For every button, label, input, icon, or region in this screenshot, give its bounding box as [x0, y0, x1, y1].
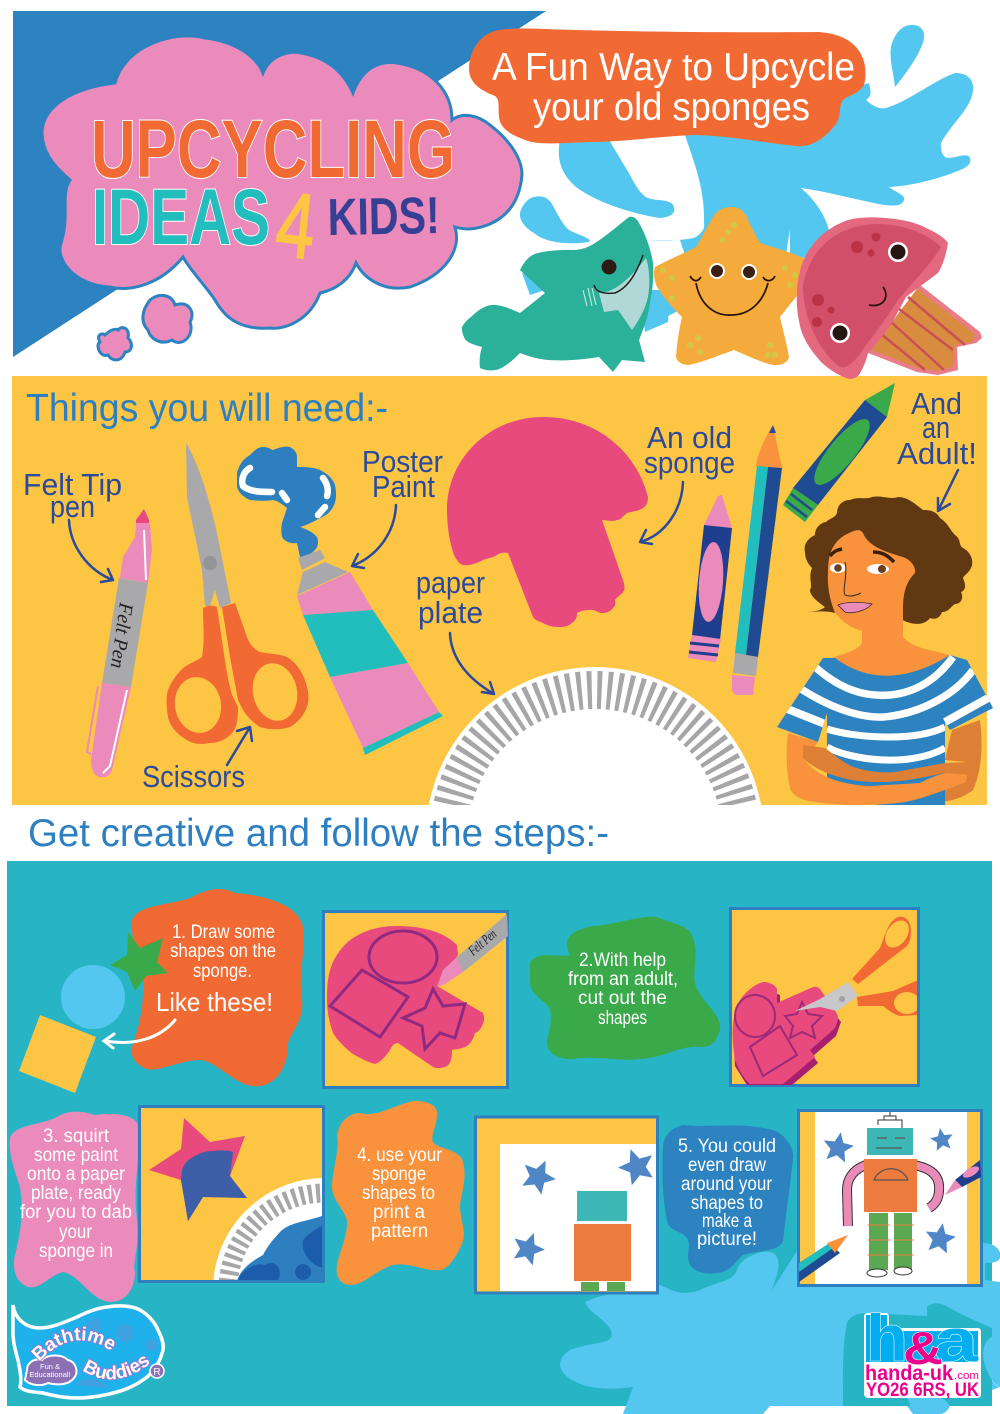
step 3 blob: your: [59, 1222, 93, 1243]
facial features: [830, 549, 894, 613]
jellyfish sponge: [797, 217, 982, 379]
label: paper plate: paper: [416, 565, 485, 600]
neck: [826, 610, 952, 690]
logo: bathtime buddies: [11, 1304, 165, 1400]
heading: get creative: Get creative and follow the steps:-: [28, 812, 609, 855]
cloud text: [29, 1362, 71, 1379]
step 1 blob: shapes on the: [170, 941, 276, 962]
step 3 blob: [10, 1112, 139, 1302]
felt tip pen: [87, 509, 152, 777]
label: scissors: Scissors: [142, 759, 245, 794]
step 1 text: 1. Draw some: [172, 922, 275, 943]
panel: steps: [7, 861, 1000, 1414]
step 2 blob: cut out the: [578, 988, 667, 1009]
small cloud 1: [143, 295, 192, 342]
step 4 blob: [332, 1101, 465, 1285]
brand text: Buddies: [82, 1356, 150, 1380]
registered mark: [150, 1364, 164, 1378]
step 4 text: 4. use your: [357, 1145, 443, 1166]
step 5 blob: [662, 1125, 793, 1274]
small cloud 2: [98, 328, 131, 360]
forearms: [787, 733, 968, 805]
adult illustration: [770, 497, 1000, 810]
logo: h&a: a: [934, 1307, 979, 1374]
step box 2: [730, 908, 920, 1090]
shape: yellow square: [19, 1015, 96, 1093]
cloud text: Fun &: [40, 1362, 60, 1371]
step 5 blob: picture!: [697, 1229, 757, 1250]
logo: h&a: &: [903, 1322, 943, 1374]
labels: [23, 386, 977, 794]
brand text: [30, 1326, 150, 1380]
title text: KIDS!: [327, 187, 440, 247]
subtitle banner: [469, 28, 866, 146]
sponge with drawn shapes: [327, 926, 484, 1068]
logo: bathtime buddies: R: [153, 1367, 161, 1378]
step 2 blob: shapes: [598, 1008, 647, 1029]
step 4 blob: pattern: [371, 1221, 428, 1242]
panel: things you will need: [12, 376, 993, 805]
step 3 blob: plate, ready: [31, 1183, 121, 1204]
step 5 blob: make a: [702, 1211, 752, 1232]
label: felt tip pen: pen: [50, 489, 95, 524]
cut sponge: [734, 994, 841, 1085]
step box 3: [138, 1105, 325, 1283]
step 5 text: 5. You could: [678, 1136, 776, 1157]
logo: h&a: h: [866, 1301, 908, 1375]
label: poster paint: Paint: [372, 469, 435, 504]
label: felt tip pen: Felt Tip: [23, 467, 122, 502]
arms: [895, 720, 982, 802]
face: [828, 530, 915, 632]
title text: IDEAS: [92, 172, 270, 261]
step 5 blob: around your: [681, 1174, 773, 1195]
green crayon: [783, 383, 895, 522]
robot picture: [847, 1112, 939, 1277]
jellyfish sponge shape: [447, 417, 648, 627]
shape: blue circle: [61, 965, 125, 1029]
logo: h&a: YO26 6RS, UK: [866, 1380, 979, 1401]
step 2 blob: [530, 917, 720, 1060]
shirt: [777, 655, 993, 805]
subtitle text: A Fun Way to Upcycle: [492, 46, 855, 89]
hair: [805, 497, 972, 624]
shark sponge: [462, 217, 653, 372]
arrow: to shapes: [104, 1020, 175, 1048]
step box 4: [476, 1117, 659, 1293]
step 3 blob: some paint: [34, 1145, 119, 1166]
title text: UPCYCLING: [91, 104, 455, 195]
logo: h&a: handa-uk: [865, 1362, 953, 1385]
poster paint tube: [237, 447, 443, 755]
shark eye: [602, 260, 616, 274]
step 4 blob: print a: [373, 1202, 425, 1223]
title text: [91, 104, 455, 279]
scissors in box 2: [795, 982, 858, 1011]
jelly eyes and smile: [888, 242, 908, 262]
step 1 blob: sponge.: [193, 961, 252, 982]
label: poster paint: [362, 444, 443, 504]
label: paper plate: [416, 565, 485, 630]
purple cloud: [25, 1356, 76, 1385]
label: felt tip pen: [23, 467, 122, 524]
subtitle text: your old sponges: [533, 86, 810, 129]
logo: h&a: [864, 1301, 981, 1401]
header splash: [520, 25, 973, 332]
logo: h&a: .com: [954, 1370, 979, 1382]
printed robot: [577, 1191, 627, 1221]
label: an old sponge: [644, 420, 735, 480]
scissors: [166, 443, 308, 744]
star eyes and smile: [709, 263, 725, 279]
felt tip pen: Felt Pen: [106, 600, 137, 670]
label: and an adult: [897, 386, 977, 471]
label: an old sponge: sponge: [644, 445, 735, 480]
title cloud: [42, 36, 522, 360]
step 2 text: 2.With help: [579, 950, 666, 971]
label: an old sponge: An old: [647, 420, 732, 455]
step 5 blob: shapes to: [691, 1193, 763, 1214]
brand text: Bathtime: [30, 1326, 116, 1362]
subtitle text: [492, 46, 855, 129]
pattern: [75, 1318, 158, 1388]
pen in box 1: Felt Pen: [465, 927, 500, 959]
pen in box 1: [437, 914, 508, 987]
pencil: [732, 425, 782, 695]
title text: 4: [272, 173, 320, 279]
paper plate with paint: [213, 1178, 322, 1280]
step 5 blob: even draw: [688, 1155, 766, 1176]
paper plate: [428, 667, 762, 805]
step 2 blob: from an adult,: [568, 969, 678, 990]
paint sponge star: [149, 1118, 247, 1221]
step 1 blob: [132, 889, 304, 1086]
pencil and crayon: [799, 1243, 840, 1282]
step 3 blob: for you to dab: [20, 1202, 132, 1223]
step 4 blob: shapes to: [362, 1183, 435, 1204]
cloud text: Educational!: [29, 1370, 71, 1379]
step 3 text: 3. squirt: [43, 1126, 110, 1147]
bottom splash: [560, 1243, 1000, 1414]
label: and an adult: an: [922, 410, 950, 445]
step box 1: [324, 912, 508, 1088]
label: poster paint: Poster: [362, 444, 443, 479]
step 3 blob: sponge in: [39, 1241, 113, 1262]
shape: green star: [110, 932, 168, 991]
label: and an adult: Adult!: [897, 436, 977, 471]
step 3 blob: onto a paper: [27, 1164, 126, 1185]
small pink crayon: [688, 495, 732, 662]
starfish sponge: [654, 207, 810, 365]
header blue triangle: [13, 11, 546, 357]
heading: things you will need: Things you will need:-: [26, 387, 388, 430]
label: and an adult: And: [911, 386, 962, 421]
shark mouth patch: [599, 258, 649, 330]
printed stars: [508, 1143, 659, 1267]
arrows: [69, 470, 958, 765]
step box 5: [798, 1110, 982, 1286]
step 4 blob: sponge: [372, 1164, 426, 1185]
label: paper plate: plate: [418, 595, 483, 630]
step 1 blob: Like these!: [156, 987, 273, 1017]
